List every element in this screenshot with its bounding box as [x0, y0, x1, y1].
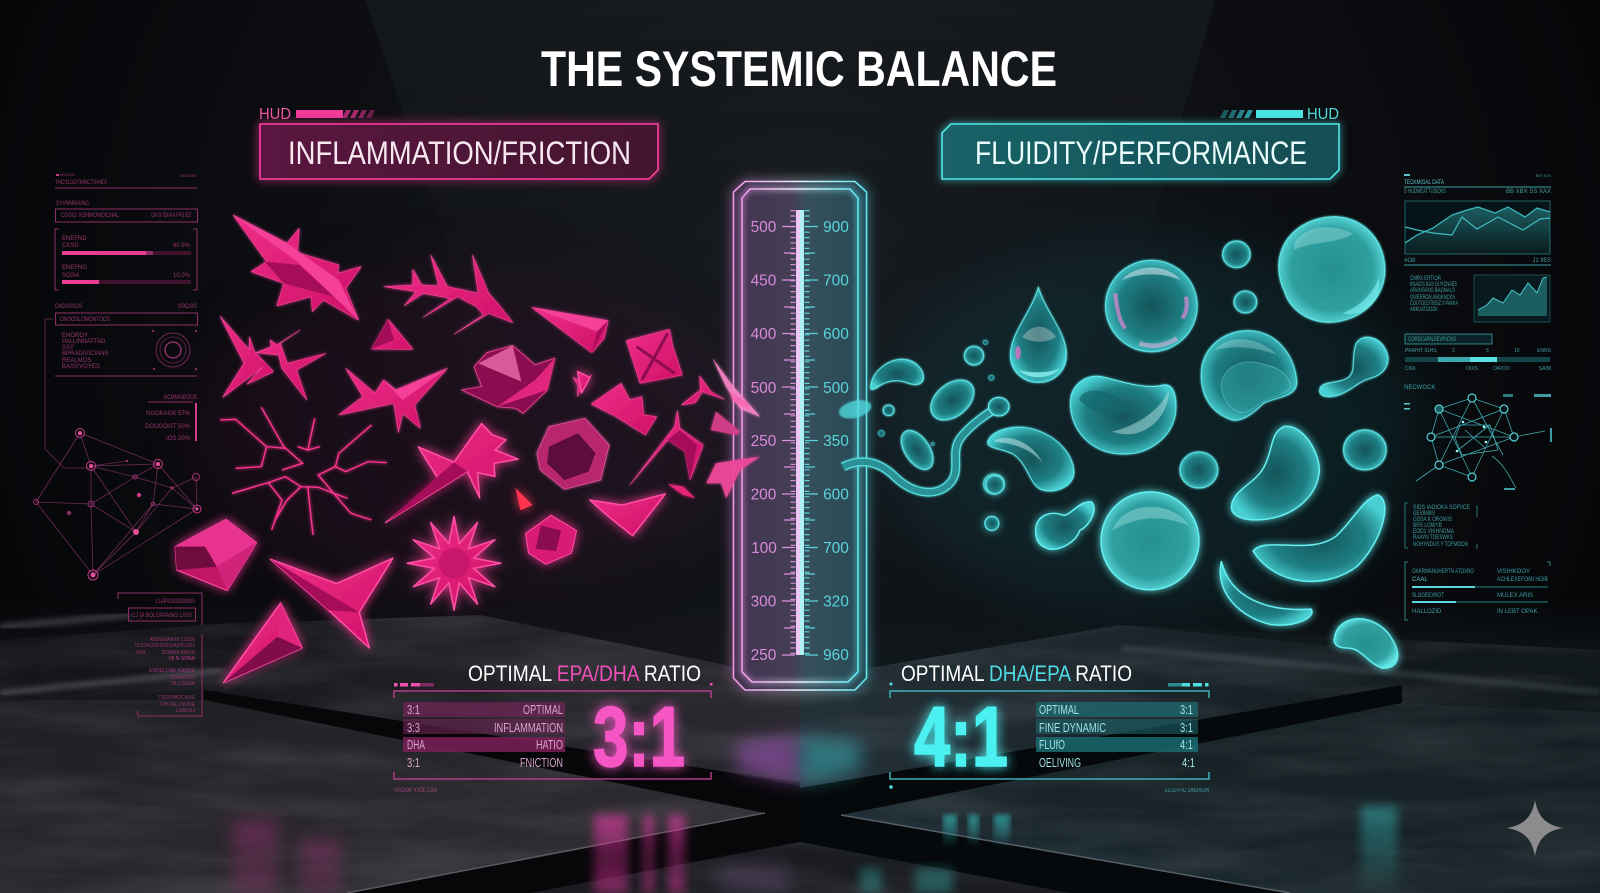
right lower hud text and progress: RAAYN TOESWKS [1413, 535, 1453, 541]
icon: sparkle watermark [1507, 800, 1563, 856]
gauge center column [796, 210, 804, 655]
left hud panel: IOS 20% [166, 436, 191, 442]
flat kite shard [590, 494, 665, 536]
crescent [871, 359, 923, 389]
left hud panel: CKSD [62, 243, 79, 249]
floor: marble slabs and reflections [0, 600, 1600, 893]
small bubble top [1223, 241, 1250, 268]
pink shards: lower field [175, 371, 665, 683]
hud tag right: HUD [1307, 106, 1339, 123]
right lower hud text and progress: MULEX ARIS [1497, 593, 1533, 599]
shard C [372, 319, 413, 349]
shard E [220, 316, 273, 397]
gauge right scale numbers: 500 [823, 380, 849, 397]
blob mid [1180, 452, 1218, 488]
shard D cone [532, 307, 608, 353]
rows [1036, 702, 1198, 770]
gauge left scale numbers: 250 [751, 647, 777, 664]
left network diagram [34, 428, 201, 580]
left hud panel: ONOARUOS [55, 304, 82, 310]
gauge left scale numbers: 300 [751, 594, 777, 610]
right lower hud text and progress: SLOGEEXROT [1412, 593, 1444, 599]
right lower hud text and progress: VISIHKOOY [1497, 569, 1530, 575]
cracks [220, 407, 387, 535]
cyan stream from gauge [837, 397, 1009, 492]
right lower hud text and progress: GEVIMIBS [1413, 511, 1435, 517]
shard M [630, 411, 703, 485]
rows: 3:1 [407, 756, 420, 770]
left hud panel: ENOROY [62, 333, 88, 339]
gauge left scale numbers: 500 [751, 380, 777, 397]
rows: 3:1 [1180, 721, 1193, 735]
left hud panel: BASS'VOYES [62, 364, 100, 370]
blob small right [1344, 430, 1386, 470]
crescent large [1253, 495, 1385, 581]
right hud panel: QWERRON ABGKNCKS [1410, 295, 1455, 301]
left hud panel: SO2I4 [62, 273, 80, 279]
left hud panel: ONOOSLOMONTOOS [60, 317, 110, 323]
left lower hud panel [118, 593, 202, 716]
shard L gem [537, 418, 609, 489]
tadpole [1320, 337, 1388, 397]
hud tag left [259, 106, 375, 123]
spiky ball [407, 516, 501, 610]
small bubble mid [1234, 291, 1257, 313]
pink shards: upper field [220, 215, 725, 489]
shard H gem [462, 346, 555, 413]
bean tall [1231, 426, 1319, 520]
rows: 3:3 [407, 721, 420, 735]
right hud panel: SAIM [1539, 366, 1551, 372]
shard G [339, 368, 447, 433]
label: inflammation/friction [260, 124, 658, 179]
rows: FINE DYNAMIC [1039, 721, 1106, 735]
teardrop [1010, 288, 1066, 382]
shard A [233, 215, 361, 320]
left hud panel: BCMMAIEOOS [164, 395, 197, 401]
gauge left scale numbers: 400 [751, 326, 777, 343]
crescent thin [1220, 561, 1312, 625]
right hud panel: ARANSANS BAGNALS [1410, 288, 1455, 294]
shard K [591, 383, 657, 435]
big bubble [1279, 217, 1385, 322]
left hud panel: ON 9 IDIVIA FP3.BZ [151, 213, 191, 219]
bean bottom [1334, 619, 1398, 668]
small peanut [1036, 502, 1094, 549]
kidney second [988, 427, 1074, 491]
left lower hud panel: LSAOSJ [176, 708, 195, 714]
left lower hud panel: IXXI [136, 650, 145, 656]
shard N [681, 376, 725, 405]
left hud panel: 10.0% [173, 273, 191, 279]
rows: OPTIMAL [1039, 703, 1079, 717]
right lower hud text and progress [1405, 503, 1550, 620]
rows: OELIVING [1039, 756, 1081, 770]
right hud panel: ANKUATOOOK [1410, 307, 1438, 313]
left lower hud panel: CSOOWOCKNS [158, 695, 196, 701]
right lower hud text and progress: GOSA K OROWIS [1413, 517, 1452, 523]
cyan blobs: upper field [871, 217, 1388, 494]
gauge right scale numbers: 600 [823, 486, 849, 504]
right hud panel: CMRX ERTIOR [1410, 276, 1441, 282]
gauge right scale numbers: 900 [823, 219, 849, 236]
left hud panel: REALMOS [62, 358, 91, 364]
right hud panel: CNX [1405, 366, 1416, 372]
gauge right scale numbers: 320 [823, 594, 849, 610]
shard shuriken [270, 558, 393, 648]
small gem [526, 515, 577, 564]
big ratio: 3:1 [593, 690, 685, 785]
mini area chart [1474, 275, 1550, 322]
left hud panel: PALLINNATTAD [62, 339, 106, 345]
right hud panel: 5 [1486, 348, 1489, 354]
rows: 4:1 [1182, 756, 1195, 770]
dha/epa panel: ELUDTFIC DINGXION [1165, 788, 1209, 794]
gauge right scale numbers: 700 [823, 540, 849, 557]
shard R [386, 423, 518, 522]
gauge left scale numbers: 250 [751, 433, 777, 450]
heading: OPTIMAL DHA/EPA RATIO [901, 661, 1132, 686]
left lower hud panel: ANDIDAJAVENT CSDOZ [150, 637, 195, 643]
rows: 3:1 [407, 703, 420, 717]
iridescent bubble [1106, 260, 1197, 352]
right hud panel: OIROO [1493, 366, 1510, 372]
left hud panel [45, 173, 198, 468]
left lower hud panel: OLCSENA [171, 681, 196, 687]
right lower hud text and progress: BRS LOWYB [1413, 523, 1442, 529]
right lower hud text and progress: OKKRMANUHERTN ATOXRO [1412, 569, 1474, 575]
right lower hud text and progress: SIDS IAOIOKA SOFIICE [1413, 505, 1470, 511]
right lower hud text and progress: HALLOZID [1412, 609, 1442, 615]
right hud panel: OIXS [1466, 366, 1479, 372]
left hud panel: ENEFND [62, 236, 87, 242]
cyan blobs: lower field [985, 426, 1398, 668]
left hud panel: SYVNMMAING [56, 201, 89, 207]
shard F [256, 330, 326, 400]
left hud panel: S0O3S [178, 304, 197, 310]
shard J [573, 375, 592, 397]
right hud panel: PKAHIT IGHS [1405, 348, 1437, 354]
left lower hud panel: 1 LAPVOODOMONS [155, 599, 195, 605]
kidney large [1070, 376, 1176, 454]
radial gauge widget [152, 330, 197, 370]
line chart [1405, 201, 1550, 254]
central dual-scale gauge [734, 182, 866, 690]
left lower hud panel: CJ ]A BOLOAVAING LIVIS [132, 613, 192, 619]
gauge left scale numbers: 500 [751, 219, 777, 236]
hud tag left: HUD [259, 106, 291, 123]
blob large [1201, 331, 1297, 420]
left hud panel: CGGID XOHMOMOICHAL [61, 213, 120, 219]
rows: OPTIMAL [523, 703, 563, 717]
gauge left scale numbers: 450 [751, 272, 777, 290]
rows: 3:1 [1180, 703, 1193, 717]
hud tag right [1220, 106, 1339, 123]
left lower hud panel: CHITALLOONE [160, 702, 196, 708]
gauge left scale numbers: 100 [751, 540, 777, 557]
title: THE SYSTEMIC BALANCE [541, 41, 1057, 97]
droplets [878, 340, 1004, 494]
left hud panel: DOOGOGT 50% [145, 424, 191, 430]
left lower hud panel: TOANOCO [170, 675, 195, 681]
epa/dha panel: VISOIOIF KXSE.COM [394, 788, 437, 794]
right hud panel: BITI IOS [1536, 173, 1551, 178]
right hud panel: 10 [1514, 348, 1520, 354]
rows: DHA [407, 738, 425, 752]
right hud panel: BB XBX SS XAX [1506, 189, 1551, 195]
small sliver [578, 371, 590, 393]
tiny shard [515, 488, 533, 510]
gauge right scale numbers: 600 [823, 326, 849, 343]
left hud panel: NGOKAGK 57% [146, 411, 191, 417]
right lower hud text and progress: ACHLEXEFOMI HOIB [1497, 577, 1548, 583]
left hud panel: THCS1OOTKINCTSIHES [55, 180, 107, 186]
label: inflammation/friction: INFLAMMATION/FRICTION [288, 135, 631, 171]
right hud panel: COUTOOSTBSIZ 0 PAIHIA [1410, 301, 1458, 307]
gauge left scale numbers [751, 219, 777, 664]
rows: 4:1 [1180, 738, 1193, 752]
right hud panel [1404, 173, 1552, 391]
rows [403, 702, 565, 770]
shard B thorn [384, 255, 513, 334]
rows: HATIO [536, 738, 563, 752]
rows: INFLAMMATION [494, 721, 563, 735]
left hud panel: NNOXKK [60, 173, 75, 177]
left lower hud panel: VII N SONA [168, 656, 196, 662]
gauge ticks [782, 210, 818, 655]
gauge right scale numbers: 700 [823, 272, 849, 290]
right network diagram [1404, 394, 1552, 490]
hud accents [394, 683, 712, 686]
right lower hud text and progress: CAAL [1412, 577, 1428, 583]
label: fluidity/performance: FLUIDITY/PERFORMANCE [975, 135, 1307, 171]
kite shard [223, 603, 302, 683]
right lower hud text and progress: EOD1 VIKHNOMA [1413, 529, 1454, 535]
right lower hud text and progress: IN LEBT OPAK [1497, 609, 1537, 615]
left lower hud panel: ENDELOAE KAOKE [149, 668, 196, 674]
right hud panel: S HUOMEATTUSIOKS [1404, 189, 1446, 195]
shards entering gauge [668, 359, 760, 498]
left lower hud panel: DOANA MAXS [162, 650, 196, 656]
big gem [175, 519, 257, 591]
right hud panel: J1 95S [1532, 258, 1551, 264]
right hud panel: TECKMIGAL DATA [1404, 180, 1444, 186]
right hud panel: 2 [1452, 348, 1455, 354]
gauge right scale numbers: 960 [823, 647, 849, 664]
right lower hud text and progress: NOHYNDUS Y TOFMOON [1413, 542, 1468, 548]
left hud panel: SSY [62, 345, 74, 351]
oval [923, 372, 982, 428]
label: fluidity/performance [942, 124, 1339, 179]
gauge right scale numbers [823, 219, 849, 664]
heading: OPTIMAL EPA/DHA RATIO [468, 661, 701, 686]
epa/dha panel [394, 661, 712, 794]
rows: FLUfO [1039, 738, 1065, 752]
shard I diamond [626, 329, 682, 383]
left hud panel: NOKKKK [180, 173, 197, 178]
hud accents [889, 682, 1208, 789]
dha/epa panel [889, 661, 1209, 794]
droplet pair [985, 476, 1004, 531]
left hud panel: ENEFNG [62, 265, 87, 271]
right hud panel: CORDCARNJIEVRICNS [1408, 337, 1456, 343]
right hud panel: NECWOCK [1404, 385, 1435, 391]
gauge left scale numbers: 200 [751, 486, 777, 504]
bubble lower [1101, 492, 1199, 590]
big ratio: 4:1 [914, 690, 1008, 785]
oval lower [895, 425, 940, 475]
rows: FNICTION [520, 756, 563, 770]
left lower hud panel: UCSOAOSFUVDISSANTIUSNA [135, 643, 196, 649]
left hud panel: 60 9% [173, 243, 191, 249]
left hud panel: BPRADIVICIANS [62, 351, 108, 357]
right hud panel: #O8 [1404, 258, 1416, 264]
gauge right scale numbers: 350 [823, 433, 849, 450]
right hud panel: ENNS [1537, 348, 1552, 354]
right hud panel: BNAIOS BAS GUYCNAES [1410, 282, 1457, 288]
